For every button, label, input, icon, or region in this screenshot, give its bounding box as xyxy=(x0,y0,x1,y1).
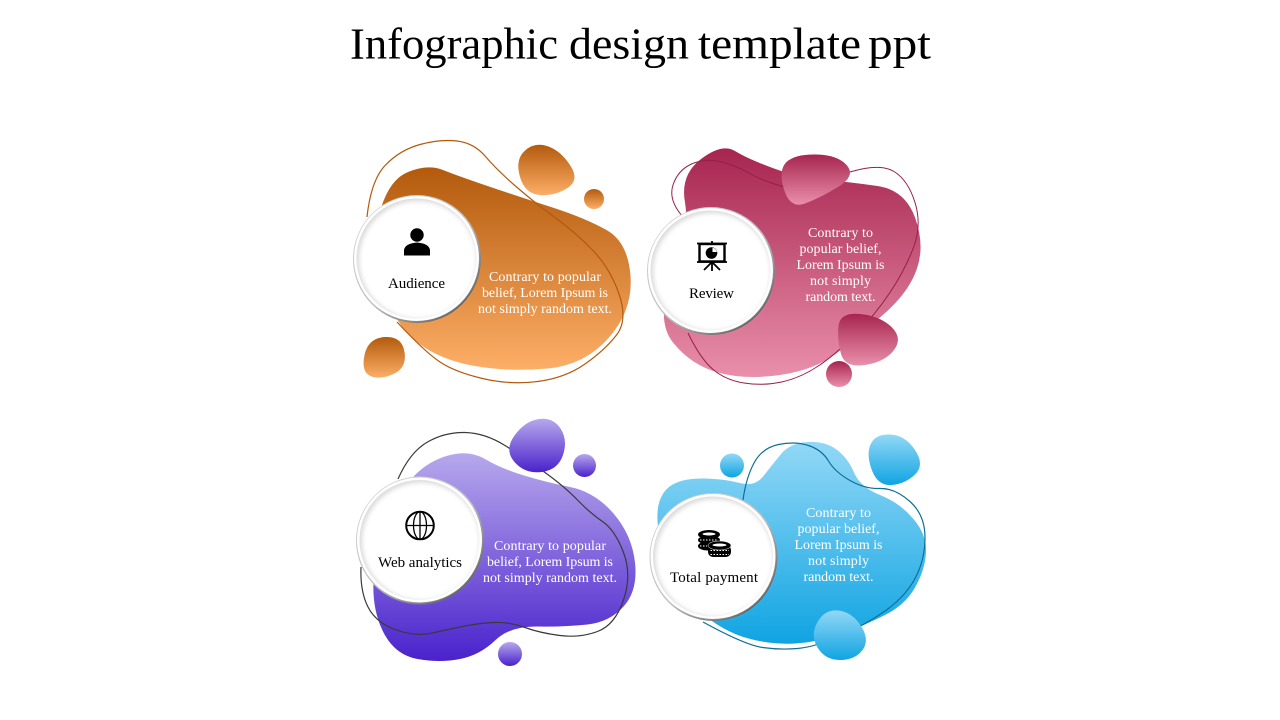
pink main blob xyxy=(664,148,921,377)
orange small blob bottom xyxy=(364,337,405,378)
pink description: Contrary to xyxy=(808,226,873,241)
purple outline xyxy=(361,432,628,636)
orange description: not simply random text. xyxy=(478,302,612,317)
panel: total payment xyxy=(650,434,926,660)
blue small blob top xyxy=(869,434,920,485)
title xyxy=(350,20,931,68)
blue description xyxy=(794,506,882,585)
title: ppt xyxy=(868,20,931,68)
blue description: Lorem Ipsum is xyxy=(794,538,882,553)
orange main blob xyxy=(375,167,631,370)
pink small blob top xyxy=(782,154,850,205)
icon: globe xyxy=(406,512,434,539)
total payment badge xyxy=(650,493,778,621)
purple dot top xyxy=(573,454,596,477)
panel: review xyxy=(647,148,921,387)
orange description xyxy=(478,270,612,317)
purple description xyxy=(483,539,617,586)
pink description: Lorem Ipsum is xyxy=(796,258,884,273)
pink description xyxy=(796,226,884,305)
orange outline xyxy=(367,140,623,383)
title: Infographic xyxy=(350,20,558,68)
audience label: Audience xyxy=(388,276,445,292)
purple dot bottom xyxy=(498,642,522,666)
icon: coins xyxy=(698,530,731,557)
pink dot xyxy=(826,361,852,387)
blue description: not simply xyxy=(808,554,869,569)
pink description: random text. xyxy=(806,290,876,305)
total payment label: Total payment xyxy=(670,570,759,586)
pink description: not simply xyxy=(810,274,871,289)
blue description: popular belief, xyxy=(798,522,880,537)
blue outline xyxy=(703,443,925,649)
pink outline xyxy=(672,160,918,384)
icon: person xyxy=(404,228,430,256)
panel: audience xyxy=(353,140,631,383)
pink small blob bottom xyxy=(838,314,898,366)
panel: web analytics xyxy=(356,419,636,666)
title: template xyxy=(698,20,861,68)
icon: presentation board xyxy=(697,241,727,271)
purple main blob xyxy=(373,453,636,661)
purple description: not simply random text. xyxy=(483,571,617,586)
orange description: Contrary to popular xyxy=(489,270,601,285)
purple description: Contrary to popular xyxy=(494,539,606,554)
audience badge xyxy=(353,195,481,323)
orange small blob top xyxy=(518,145,574,195)
blue description: random text. xyxy=(804,570,874,585)
orange description: belief, Lorem Ipsum is xyxy=(482,286,608,301)
blue description: Contrary to xyxy=(806,506,871,521)
purple small blob top xyxy=(509,419,565,472)
web analytics label: Web analytics xyxy=(378,555,462,571)
blue small blob bottom xyxy=(814,610,866,660)
orange dot xyxy=(584,189,604,209)
blue main blob xyxy=(657,442,926,644)
blue dot xyxy=(720,454,744,478)
web analytics badge xyxy=(356,476,484,604)
purple description: belief, Lorem Ipsum is xyxy=(487,555,613,570)
pink description: popular belief, xyxy=(800,242,882,257)
title: design xyxy=(569,20,689,68)
review badge xyxy=(647,207,775,335)
review label: Review xyxy=(689,286,734,302)
